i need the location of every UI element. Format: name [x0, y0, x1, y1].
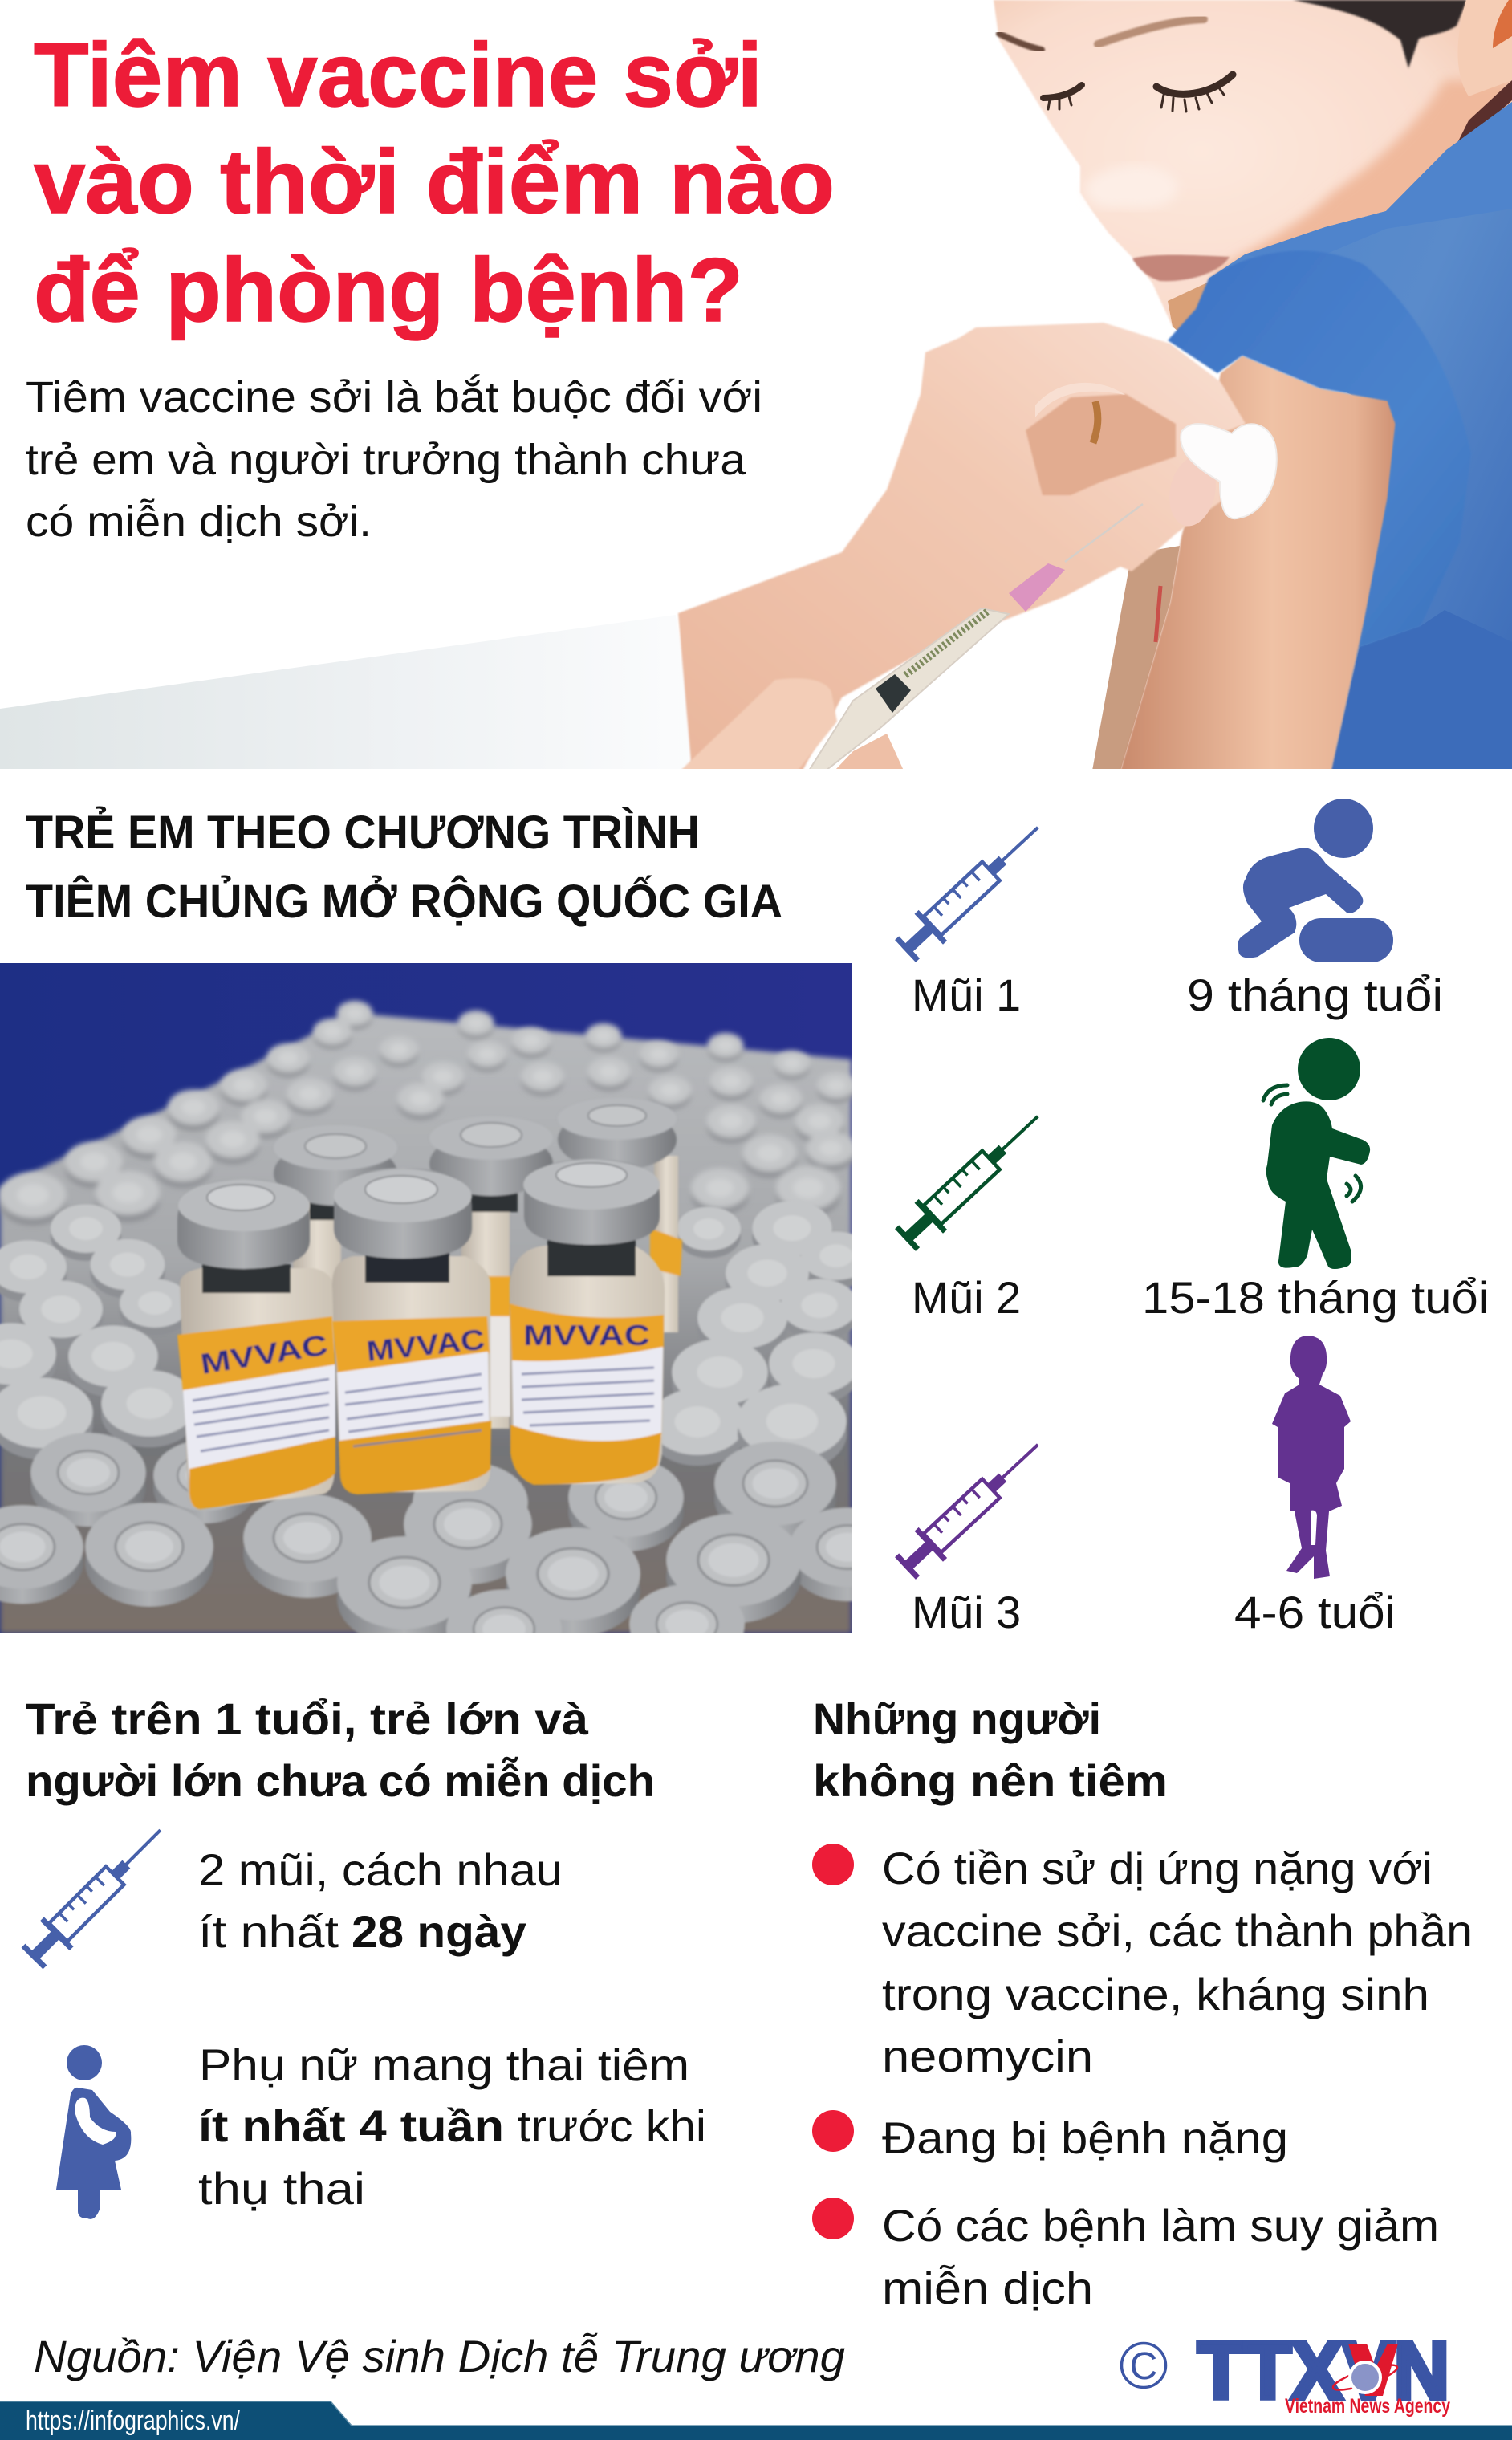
text: pregnant women advice — [198, 2039, 706, 2214]
label: Mũi 3: Mũi 3 — [912, 1587, 1021, 1637]
icon: crawling baby — [1238, 799, 1393, 962]
label: Mũi 1: Mũi 1 — [912, 970, 1021, 1020]
logo: TTXVN Vietnam News Agency: TTXVN — [1197, 2326, 1449, 2416]
section heading: children schedule — [26, 807, 782, 928]
schedule row: dose 1, 9 months — [891, 799, 1443, 1020]
text: two doses at least 28 days apart: ít nhất — [198, 1906, 339, 1957]
child lips — [1132, 255, 1230, 281]
text: pregnant women advice: ít nhất 4 tuần — [198, 2100, 504, 2151]
text: two doses at least 28 days apart: 2 mũi, cách nhau — [198, 1844, 563, 1895]
child sleeve — [1168, 250, 1471, 647]
hero photo: child receiving vaccine — [0, 0, 1512, 769]
heading: who should not be vaccinated: Những người — [813, 1694, 1101, 1744]
schedule row: dose 3, 4-6 years — [891, 1336, 1396, 1637]
heading: older children and adults: Trẻ trên 1 tuổi, trẻ lớn và — [26, 1694, 589, 1744]
syringe with pink hub — [809, 504, 1143, 771]
list: contraindications — [812, 1843, 1473, 2313]
back vials — [274, 1098, 682, 1429]
child ear — [1457, 0, 1512, 96]
icon: pregnant woman — [56, 2045, 131, 2219]
label: 15-18 months: 15-18 tháng tuổi — [1142, 1272, 1489, 1323]
intro text — [26, 373, 762, 546]
bullet item: severe illness: Đang bị bệnh nặng — [882, 2113, 1288, 2163]
title: Tiêm vaccine sởi — [34, 25, 762, 125]
intro text: Tiêm vaccine sởi là bắt buộc đối với — [26, 373, 762, 421]
text: two doses at least 28 days apart: 28 ngày — [352, 1906, 526, 1957]
doctor coat sleeve — [0, 615, 698, 769]
label: 9 months: 9 tháng tuổi — [1187, 970, 1443, 1020]
footer bar — [0, 2401, 1512, 2440]
bullet item: allergy: neomycin — [882, 2031, 1093, 2081]
nurse hand and wrist — [678, 323, 1246, 771]
text: two doses at least 28 days apart — [198, 1844, 563, 1957]
icon: blue syringe — [891, 812, 1052, 966]
intro text: trẻ em và người trưởng thành chưa — [26, 436, 746, 484]
vial 3: MVVAC — [523, 1319, 650, 1352]
item: two doses — [18, 1816, 563, 1973]
footer url: https://infographics.vn/ — [26, 2405, 240, 2436]
heading: who should not be vaccinated — [813, 1694, 1168, 1806]
thumb nail — [1163, 452, 1222, 531]
schedule row: dose 2, 15-18 months — [891, 1038, 1489, 1323]
vial 2: MVVAC — [365, 1323, 486, 1368]
vial 2 — [332, 1168, 491, 1494]
copyright symbol: C — [1130, 2345, 1157, 2388]
child hair — [1293, 0, 1466, 68]
title: vào thời điểm nào — [34, 132, 835, 232]
section heading: children schedule: TIÊM CHỦNG MỞ RỘNG QUỐC GIA — [26, 876, 782, 928]
vial 1: MVVAC — [198, 1328, 330, 1381]
vial 1 — [177, 1179, 335, 1509]
child torso behind arm — [1092, 546, 1180, 771]
child face — [994, 0, 1512, 337]
heading: older children and adults: người lớn chưa có miễn dịch — [26, 1755, 655, 1806]
icon: walking toddler — [1263, 1038, 1370, 1269]
icon: green syringe — [891, 1101, 1052, 1255]
heading: older children and adults — [26, 1694, 655, 1806]
bullet item: immune conditions: miễn dịch — [882, 2263, 1093, 2313]
bullet item: immune conditions: Có các bệnh làm suy giảm — [882, 2200, 1439, 2251]
photo: MVVAC vaccine vials — [0, 963, 852, 1633]
child arm — [1120, 356, 1396, 771]
item: pregnant women — [56, 2039, 706, 2219]
label: 4-6 years: 4-6 tuổi — [1234, 1587, 1396, 1637]
bullet item: immune conditions — [812, 2198, 1439, 2313]
bullet item: allergy: trong vaccine, kháng sinh — [882, 1969, 1429, 2019]
text: pregnant women advice: thụ thai — [198, 2163, 365, 2214]
heading: who should not be vaccinated: không nên tiêm — [813, 1755, 1168, 1806]
bullet item: allergy — [812, 1843, 1473, 2081]
logo: TTXVN Vietnam News Agency: Vietnam News Agency — [1285, 2395, 1450, 2418]
copyright symbol — [1122, 2344, 1165, 2388]
bullet item: allergy: vaccine sởi, các thành phần — [882, 1905, 1473, 1956]
hollow between fingers with ring — [1026, 394, 1176, 495]
child nose — [1085, 165, 1178, 208]
section heading: children schedule: TRẺ EM THEO CHƯƠNG TRÌNH — [26, 807, 700, 859]
bullet item: allergy: Có tiền sử dị ứng nặng với — [882, 1843, 1433, 1893]
title: để phòng bệnh? — [34, 240, 743, 340]
source line: Nguồn: Viện Vệ sinh Dịch tễ Trung ương — [34, 2331, 845, 2381]
cotton ball — [1181, 424, 1277, 518]
label: Mũi 2: Mũi 2 — [912, 1272, 1021, 1323]
vial 3 — [510, 1159, 665, 1485]
text: pregnant women advice: trước khi — [518, 2100, 706, 2151]
child shirt body — [1209, 102, 1512, 771]
intro text: có miễn dịch sởi. — [26, 498, 372, 546]
icon: blue syringe — [18, 1816, 175, 1973]
icon: standing child — [1272, 1336, 1351, 1579]
icon: purple syringe — [891, 1429, 1052, 1584]
text: pregnant women advice: Phụ nữ mang thai tiêm — [199, 2039, 689, 2090]
child eyes and eyebrows — [999, 19, 1233, 112]
title — [34, 25, 835, 340]
nurse lower fingers — [681, 678, 837, 771]
